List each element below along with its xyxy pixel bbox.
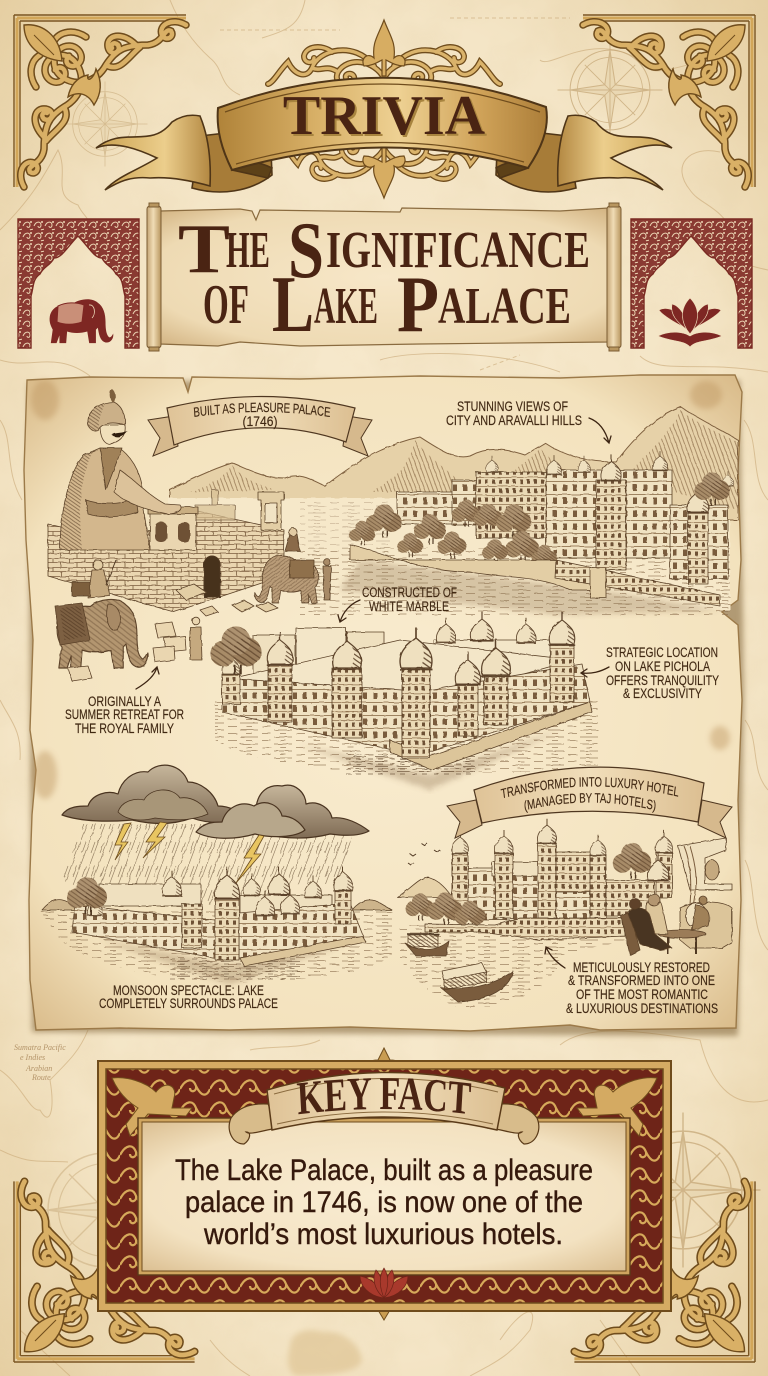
scene: central white marble palace [210, 612, 600, 790]
arrow [589, 418, 611, 443]
ribbon: built as pleasure palace: (1746) [242, 414, 278, 429]
far hill [397, 877, 452, 897]
lake water [215, 700, 600, 772]
key fact ribbon [228, 1072, 540, 1145]
round turret [258, 492, 284, 530]
title: The Significance of Lake Palace: OF [203, 274, 249, 336]
title: The Significance of Lake Palace: AKE [314, 278, 378, 335]
top ornament [268, 20, 500, 86]
scene: Taj hotel palace with terrace [397, 819, 732, 1010]
body text [175, 1154, 593, 1251]
icon: elephant [50, 299, 113, 343]
body text: world’s most luxurious hotels. [203, 1218, 563, 1251]
title: The Significance of Lake Palace: IGNIFICANCE [326, 222, 590, 279]
callout: meticulously restored: & TRANSFORMED INTO ONE [568, 973, 715, 988]
callout: meticulously restored: METICULOUSLY RESTORED [573, 960, 710, 975]
bottom cresting [364, 1306, 404, 1320]
stone blocks and mason [68, 617, 202, 681]
towers and domes [87, 866, 353, 960]
body text: palace in 1746, is now one of the [185, 1186, 583, 1219]
icon: lotus [658, 298, 722, 347]
lakeside wall [555, 560, 720, 606]
title: Trivia: TRIVIA [285, 87, 488, 149]
body text: The Lake Palace, built as a pleasure [175, 1154, 593, 1187]
decorative arch right [631, 219, 752, 348]
curtain and lounge [621, 838, 732, 955]
ribbon: transformed into luxury hotel: TRANSFORMED INTO LUXURY HOTEL [500, 777, 678, 798]
callout: summer retreat: ORIGINALLY A [88, 694, 161, 709]
callout: strategic location: ON LAKE PICHOLA [615, 659, 710, 674]
plinth [390, 702, 592, 770]
ribbon tails [96, 115, 672, 192]
bottom ornament [280, 140, 488, 198]
stains [31, 380, 730, 799]
large boat [440, 963, 513, 1002]
title: The Significance of Lake Palace: L [272, 261, 314, 349]
corner ornament: bottom right [574, 1181, 755, 1362]
lightning bolts [115, 822, 264, 883]
scene: monsoon palace [40, 824, 392, 985]
callout: stunning views: CITY AND ARAVALLI HILLS [446, 413, 582, 428]
corner ornament: top right [583, 15, 755, 187]
arrow [545, 947, 565, 968]
table [658, 930, 706, 938]
callout: stunning views [446, 399, 611, 443]
birds [408, 843, 440, 865]
palace reflection [300, 730, 560, 790]
lake water [400, 925, 625, 1010]
ribbon: transformed into luxury hotel: (MANAGED BY TAJ HOTELS) [524, 793, 656, 813]
lake water [40, 910, 392, 982]
trees [366, 504, 402, 537]
decorative arch left [18, 219, 139, 348]
callout: strategic location: STRATEGIC LOCATION [606, 645, 718, 660]
heading: key fact: KEY FACT [296, 1078, 472, 1114]
near elephant and rider [55, 560, 148, 668]
trivia banner [96, 20, 672, 198]
title: The Significance of Lake Palace: HE [226, 222, 270, 279]
callout: meticulously restored [545, 947, 718, 1016]
callout: white marble: WHITE MARBLE [369, 599, 449, 614]
sofa [680, 902, 732, 948]
towers and domes [267, 612, 575, 758]
panel: illustrated parchment map [23, 374, 748, 1040]
callout: monsoon spectacle: MONSOON SPECTACLE: LAKE [113, 983, 264, 998]
gate tower [150, 512, 196, 550]
map annotation text: Sumatra Pacific [14, 1043, 66, 1052]
callout: strategic location [581, 645, 719, 701]
map annotation text: e Indies [20, 1053, 45, 1062]
arrow [338, 600, 360, 622]
ribbon main band [218, 78, 547, 170]
map annotation text: Arabian [25, 1064, 52, 1073]
roof [225, 640, 574, 704]
title scroll [147, 203, 621, 351]
callout: strategic location: OFFERS TRANQUILITY [606, 673, 719, 688]
palace body [452, 868, 606, 920]
man on chair [621, 912, 640, 955]
trees [406, 894, 434, 921]
callout: stunning views: STUNNING VIEWS OF [457, 399, 568, 414]
callout: strategic location: & EXCLUSIVITY [623, 686, 702, 701]
callout: monsoon spectacle [99, 983, 278, 1011]
callout: summer retreat: SUMMER RETREAT FOR [65, 707, 184, 722]
map annotation text [14, 1043, 66, 1082]
lake water [300, 548, 730, 616]
panel shadow [28, 380, 744, 1036]
callout: meticulously restored: OF THE MOST ROMANTIC [576, 987, 708, 1002]
storm rain [62, 824, 355, 905]
scroll parchment [160, 208, 608, 346]
arrow [136, 667, 159, 689]
top cresting [350, 1048, 418, 1068]
ribbon: transformed into luxury hotel [446, 766, 733, 839]
ribbon: built as pleasure palace [147, 396, 373, 457]
callout: white marble [338, 585, 457, 622]
outer frame [98, 1061, 671, 1311]
far walls [195, 490, 235, 520]
title: Trivia: TRIVIA [283, 85, 486, 147]
far elephant [255, 528, 318, 603]
palace blocks [397, 492, 453, 524]
palace reflection [100, 940, 355, 985]
compass rose lower right [606, 1112, 760, 1268]
title: The Significance of Lake Palace: S [288, 207, 324, 295]
title: The Significance of Lake Palace: T [178, 211, 230, 288]
woman [646, 898, 668, 934]
palace walls [99, 884, 201, 906]
front left wall [222, 678, 402, 752]
compass rose lower left [30, 1135, 180, 1285]
storm clouds [62, 765, 369, 838]
back blocks [253, 635, 295, 675]
panel: key fact [97, 1047, 672, 1321]
tree [210, 626, 262, 674]
panel parchment [24, 375, 742, 1031]
compass rose left [62, 82, 148, 166]
corner ornament: top left [14, 15, 186, 187]
palace reflection [340, 560, 720, 615]
callout: white marble: CONSTRUCTED OF [362, 585, 457, 600]
callout: meticulously restored: & LUXURIOUS DESTINATIONS [566, 1001, 718, 1016]
Maharaja figure [60, 389, 181, 550]
griffin left [112, 1078, 192, 1136]
callout: summer retreat: THE ROYAL FAMILY [75, 721, 174, 736]
callout: summer retreat [65, 667, 184, 736]
griffin right [577, 1078, 657, 1136]
callout: monsoon spectacle: COMPLETELY SURROUNDS PALACE [99, 996, 278, 1011]
gateway arch [204, 556, 220, 597]
title: The Significance of Lake Palace: P [397, 261, 439, 349]
stain: lower page [288, 1330, 362, 1376]
scene: Maharaja and construction site [48, 389, 331, 681]
workers and stones [176, 559, 331, 616]
ribbon: built as pleasure palace: BUILT AS PLEASURE PALACE [194, 402, 330, 417]
terrace wall [425, 918, 625, 940]
compass rose right [558, 38, 662, 143]
front right wall [430, 664, 590, 752]
scene: city palace and Aravalli hills [300, 451, 734, 616]
inner text panel [138, 1118, 630, 1275]
scroll rollers [147, 203, 621, 351]
map annotation text: Route [31, 1073, 51, 1082]
arrow [581, 667, 609, 677]
far hills [42, 899, 392, 910]
small boat [405, 934, 449, 956]
lotus ornament [360, 1268, 408, 1298]
wall [48, 505, 284, 612]
title: The Significance of Lake Palace [178, 207, 590, 349]
title: The Significance of Lake Palace: ALACE [438, 278, 571, 335]
scene: mountains [168, 407, 738, 610]
corner ornament: bottom left [14, 1181, 195, 1362]
